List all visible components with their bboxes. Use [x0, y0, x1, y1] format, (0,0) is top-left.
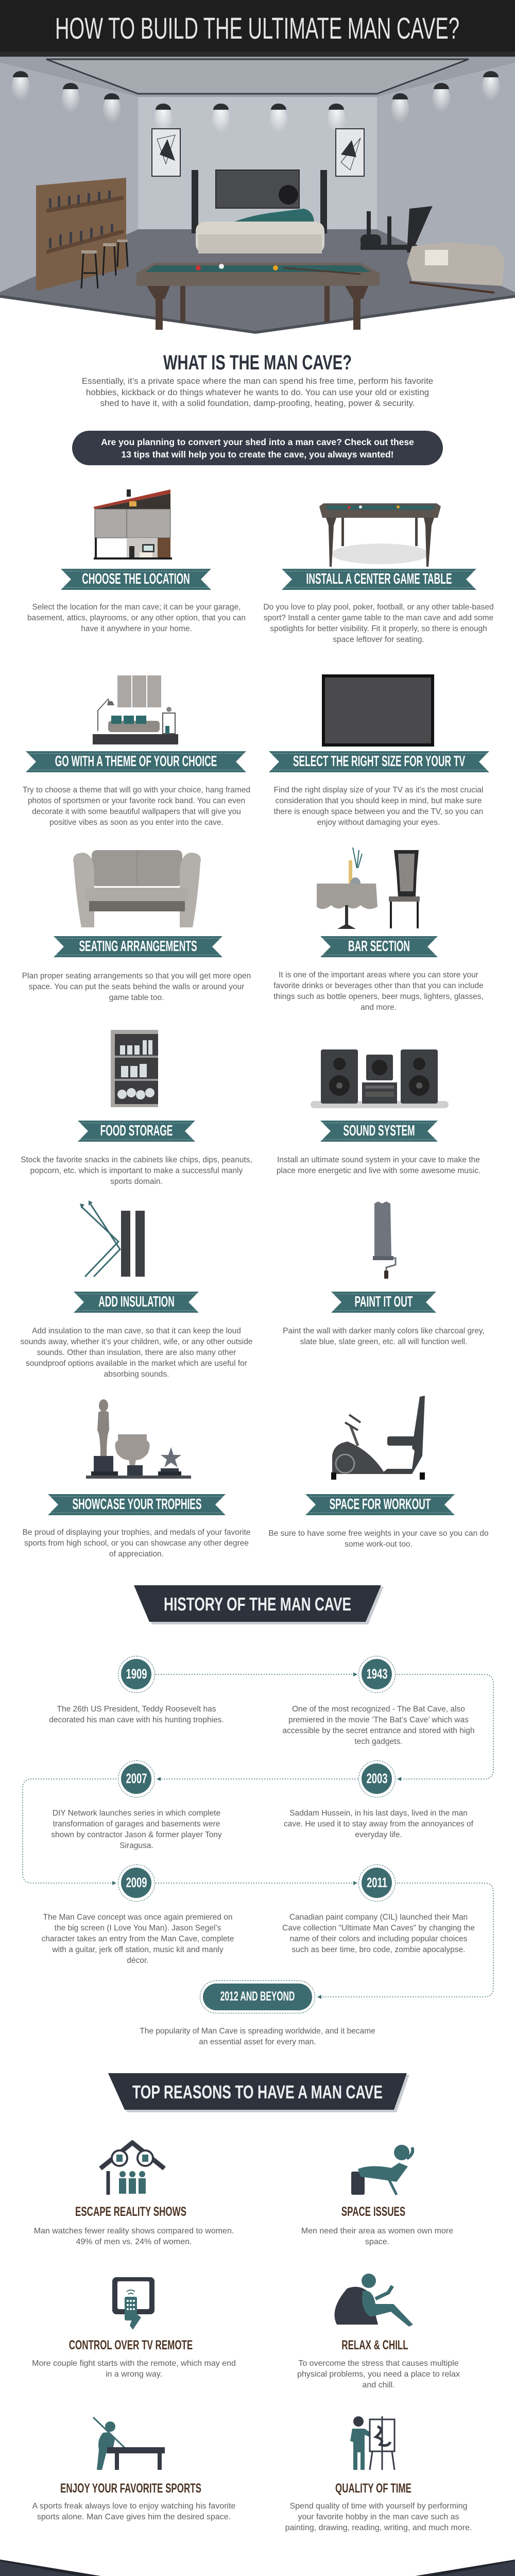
timeline node: 2012 and beyond: 2012 AND BEYOND	[220, 1989, 295, 2004]
text: remote: More couple fight starts with the remote, which may end in a wrong way.	[32, 2359, 236, 2379]
banner: seating arrangements	[54, 936, 222, 957]
icon: sound system	[311, 1049, 449, 1108]
banner: add insulation: ADD INSULATION	[98, 1294, 174, 1310]
timeline node: 2003	[358, 1760, 396, 1798]
sources footer panel	[0, 2560, 515, 2576]
banner: choose the location	[61, 569, 211, 590]
icon: relax and chill	[335, 2274, 413, 2327]
reason title: enjoy your favorite sports: ENJOY YOUR FAVORITE SPORTS	[60, 2481, 201, 2496]
text: food storage: Stock the favorite snacks in the cabinets like chips, dips, peanuts, popcorn, etc. which is important to make a successful manly sports domain.	[21, 1156, 252, 1186]
banner: food storage	[78, 1121, 195, 1142]
text: tv: Find the right display size of your TV as it’s the most crucial consideration that you should keep in mind, but make sure there is enough space between you and the TV, so you can enjoy without damaging your eyes.	[274, 786, 483, 827]
banner: bar section	[320, 936, 438, 957]
text: choose the location: Select the location for the man cave; it can be your garage, basement, attics, playrooms, or any other option, that you can have it anywhere in your home.	[27, 603, 246, 633]
timeline node: 2009	[118, 1865, 155, 1902]
banner: install a center game table: INSTALL A CENTER GAME TABLE	[306, 571, 452, 587]
intro paragraph: Essentially, it’s a private space where the man can spend his free time, perform his favorite hobbies, kickback or do things whatever he wants to do. You can use your old or existing shed to have it, with a solid foundation, damp-proofing, heating, power & security.	[82, 376, 433, 408]
icon: escape reality shows	[99, 2140, 166, 2195]
icon: playing pool	[93, 2416, 165, 2470]
icon: insulation	[80, 1200, 145, 1277]
text: relax: To overcome the stress that causes multiple physical problems, you need a place to relax and chill.	[297, 2359, 460, 2389]
icon: exercise bike	[331, 1396, 425, 1480]
banner: sound system: SOUND SYSTEM	[343, 1123, 415, 1139]
banner: select right size tv: SELECT THE RIGHT SIZE FOR YOUR TV	[293, 753, 465, 770]
text: theme: Try to choose a theme that will go with your choice, hang framed photos of sportsmen or your favorite rock band. You can even decorate it with some beautiful wallpapers that will give you positive vibes as soon as you enter into the cave.	[23, 786, 250, 827]
timeline node: 1909	[118, 1656, 155, 1693]
text: sound system: Install an ultimate sound system in your cave to make the place more energetic and live with some awesome music.	[277, 1156, 480, 1175]
icon: sofa	[73, 850, 201, 927]
timeline node: 2012 and beyond	[200, 1980, 315, 2013]
banner: install a center game table	[282, 569, 476, 590]
icon: theme room	[93, 675, 178, 744]
callout pill: Are you planning to convert your shed into a man cave? Check out these	[101, 437, 414, 447]
text: sports: A sports freak always love to enjoy watching his favorite sports alone. Man Cave gives him the desired space.	[32, 2502, 235, 2521]
hero illustration: man cave room	[0, 52, 515, 334]
callout pill: 13 tips that will help you to create the cave, you always wanted!	[121, 449, 394, 460]
text: paint: Paint the wall with darker manly colors like charcoal grey, slate blue, slate green, etc. all will function well.	[283, 1327, 485, 1346]
heading banner: top reasons	[108, 2073, 409, 2112]
banner: go with a theme	[26, 751, 246, 772]
text: 2007: DIY Network launches series in which complete transformation of garages and basements were shown by contractor Jason & former player Tony Siragusa.	[51, 1809, 222, 1850]
banner: showcase your trophies: SHOWCASE YOUR TROPHIES	[72, 1496, 201, 1513]
icon: pool table	[319, 503, 441, 567]
text: 2003: Saddam Hussein, in his last days, lived in the man cave. He used it to stay away from the annoyances of everyday life.	[284, 1809, 473, 1839]
timeline node: 2007	[118, 1760, 155, 1798]
text: 2009: The Man Cave concept was once again premiered on the big screen (I Love You Man). Jason Segel’s character takes an entry from the Man Cave, complete with a guitar, jerk off station, music kit and manly décor.	[42, 1913, 234, 1965]
icon: trophies	[86, 1399, 191, 1479]
icon: bar table and chair	[317, 848, 420, 929]
banner: choose the location: CHOOSE THE LOCATION	[82, 571, 190, 587]
text: workout: Be sure to have some free weights in your cave so you can do some work-out too.	[268, 1529, 489, 1549]
text: trophies: Be proud of displaying your trophies, and medals of your favorite sports from high school, or you can showcase any other degree of appreciation.	[23, 1528, 250, 1558]
text: 1909: The 26th US President, Teddy Roosevelt has decorated his man cave with his hunting trophies.	[49, 1705, 224, 1724]
timeline node: 1943	[358, 1656, 396, 1693]
icon: painting on easel	[350, 2416, 396, 2470]
timeline node: 2011	[358, 1865, 396, 1902]
icon: food storage cabinet	[111, 1030, 158, 1107]
text: 2012 and beyond: The popularity of Man Cave is spreading worldwide, and it became an essential asset for every man.	[140, 2027, 375, 2046]
icon: tv	[322, 674, 434, 747]
banner: showcase your trophies	[48, 1494, 226, 1515]
heading banner: history of the man cave	[134, 1585, 384, 1624]
banner: sound system	[320, 1121, 438, 1142]
text: 1943: One of the most recognized - The Bat Cave, also premiered in the movie ‘The Bat’s Cave’ which was accessible by the secret entrance and stored with high tech gadgets.	[282, 1705, 475, 1746]
banner: space for workout: SPACE FOR WORKOUT	[330, 1496, 431, 1513]
callout pill	[72, 431, 443, 465]
text: 2011: Canadian paint company (CIL) launched their Man Cave collection "Ultimate Man Caves" by changing the name of their colors and including popular choices such as beer time, bro code, zombie apocalypse.	[282, 1913, 475, 1954]
banner: bar section: BAR SECTION	[348, 938, 410, 955]
icon: paint roller	[373, 1201, 397, 1279]
timeline connectors	[22, 1672, 494, 1999]
reason title: relax and chill: RELAX & CHILL	[341, 2338, 408, 2352]
banner: seating arrangements: SEATING ARRANGEMENTS	[79, 938, 197, 955]
text: space: Men need their area as women own more space.	[301, 2227, 453, 2246]
timeline node: 2011: 2011	[367, 1875, 387, 1890]
reason title: control over tv remote: CONTROL OVER TV REMOTE	[69, 2338, 193, 2352]
text: escape: Man watches fewer reality shows compared to women. 49% of men vs. 24% of women.	[34, 2227, 234, 2246]
timeline node: 2003: 2003	[366, 1771, 387, 1786]
text: insulation: Add insulation to the man cave, so that it can keep the loud sounds away, whether it’s your children, wife, or any other outside sounds. Other than insulation, there are also many other soundproof options available in the market which are useful for absorbing sounds.	[21, 1327, 252, 1379]
banner: food storage: FOOD STORAGE	[100, 1123, 173, 1139]
timeline node: 2007: 2007	[126, 1771, 147, 1786]
text: quality: Spend quality of time with yourself by performing your favorite hobby in the man cave such as painting, drawing, reading, writing, and much more.	[285, 2502, 472, 2532]
banner: space for workout	[305, 1494, 455, 1515]
timeline node: 1943: 1943	[366, 1666, 387, 1682]
reason title: quality of time: QUALITY OF TIME	[335, 2481, 411, 2496]
reason title: space issues: SPACE ISSUES	[341, 2205, 405, 2219]
icon: location house	[93, 489, 172, 560]
banner: select right size tv	[269, 751, 489, 772]
timeline node: 2009: 2009	[126, 1875, 147, 1890]
icon: space issues	[351, 2145, 414, 2196]
title bar	[0, 0, 515, 52]
text: bar: It is one of the important areas where you can store your favorite drinks or beverages other than that you can include things such as bottle openers, beer mugs, lighters, glasses, and more.	[273, 971, 484, 1012]
banner: go with a theme: GO WITH A THEME OF YOUR CHOICE	[55, 753, 217, 770]
text: game table: Do you love to play pool, poker, football, or any other table-based sport? Install a center game table to the man cave and add some spotlights for better visibility. Fit it properly, so there is enough space leftover for seating.	[263, 603, 494, 644]
text: seating: Plan proper seating arrangements so that you will get more open space. You can put the seats behind the walls or around your game table too.	[22, 972, 251, 1002]
timeline node: 1909: 1909	[126, 1666, 147, 1682]
banner: paint it out: PAINT IT OUT	[355, 1294, 413, 1310]
reason title: escape reality shows: ESCAPE REALITY SHOWS	[75, 2205, 186, 2219]
banner: paint it out	[331, 1292, 436, 1313]
icon: tv remote	[112, 2277, 154, 2330]
banner: add insulation	[74, 1292, 199, 1313]
